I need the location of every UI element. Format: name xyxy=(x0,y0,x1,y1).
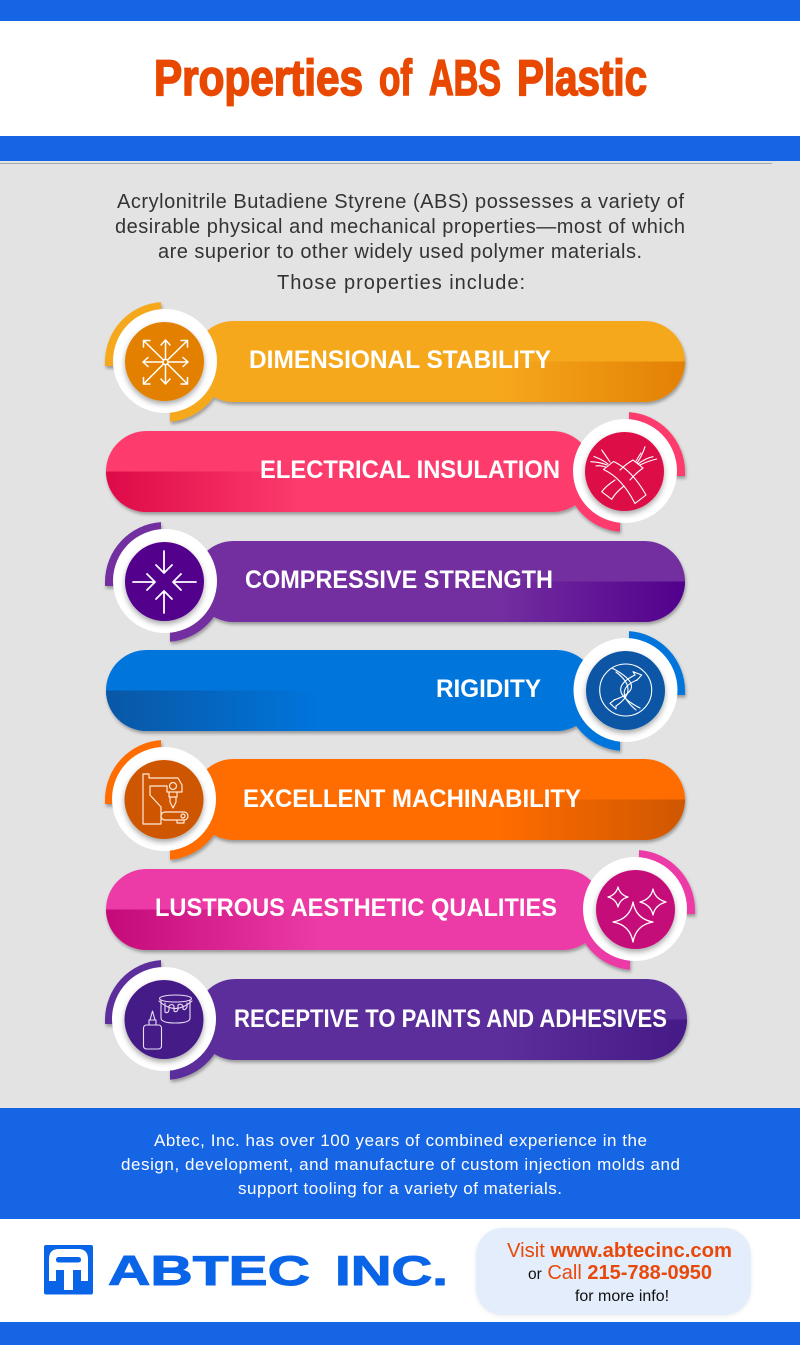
band below title xyxy=(0,136,800,161)
description text: Abtec, Inc. has over 100 years of combined experience in the xyxy=(154,1131,647,1150)
title panel xyxy=(0,21,800,136)
title: ABS xyxy=(429,50,501,106)
description text: support tooling for a variety of materials. xyxy=(238,1179,562,1198)
icon: rigid bending arrows xyxy=(600,664,652,716)
icon: crossed wires xyxy=(591,447,657,504)
banner: receptive to paints and adhesives xyxy=(105,960,687,1080)
description text: design, development, and manufacture of custom injection molds and xyxy=(121,1155,680,1174)
title xyxy=(154,50,647,106)
label: LUSTROUS AESTHETIC QUALITIES xyxy=(155,894,557,922)
intro text: desirable physical and mechanical properties—most of which xyxy=(115,216,685,238)
intro text: Those properties include: xyxy=(277,272,525,294)
icon: sparkles xyxy=(608,887,666,942)
logo wordmark: ABTEC xyxy=(108,1247,310,1294)
contact callout xyxy=(476,1228,751,1315)
logo mark xyxy=(44,1245,93,1294)
title: Plastic xyxy=(517,50,647,106)
contact callout: or Call 215-788-0950 xyxy=(528,1262,712,1284)
label: RECEPTIVE TO PAINTS AND ADHESIVES xyxy=(234,1005,667,1033)
icon: machine drill xyxy=(143,774,188,824)
icon: paint can and glue bottle xyxy=(144,995,192,1049)
icon: expanding arrows xyxy=(143,340,188,384)
top band xyxy=(0,0,800,21)
label: RIGIDITY xyxy=(436,675,541,703)
bottom band xyxy=(0,1322,800,1345)
banner: electrical insulation xyxy=(106,412,685,532)
logo wordmark: INC. xyxy=(335,1247,448,1294)
intro text: are superior to other widely used polymer materials. xyxy=(158,241,642,263)
banner: excellent machinability xyxy=(105,740,685,860)
intro text: Acrylonitrile Butadiene Styrene (ABS) possesses a variety of xyxy=(117,191,684,213)
label: EXCELLENT MACHINABILITY xyxy=(243,785,581,813)
logo wordmark xyxy=(108,1247,448,1294)
logo and contact panel xyxy=(0,1219,800,1322)
footer description panel xyxy=(0,1108,800,1219)
title: of xyxy=(379,50,412,106)
icon: compression arrows xyxy=(133,551,196,613)
label: COMPRESSIVE STRENGTH xyxy=(245,566,553,594)
intro text xyxy=(115,191,685,294)
title: Properties xyxy=(154,50,363,106)
label: DIMENSIONAL STABILITY xyxy=(249,346,551,374)
banner: dimensional stability xyxy=(105,302,685,422)
banner: lustrous aesthetic qualities xyxy=(106,850,695,970)
banner: compressive strength xyxy=(105,522,685,642)
contact callout: for more info! xyxy=(575,1288,669,1305)
banner: rigidity xyxy=(106,631,685,751)
description text xyxy=(121,1131,680,1198)
label: ELECTRICAL INSULATION xyxy=(260,456,560,484)
contact callout: Visit www.abtecinc.com xyxy=(507,1240,732,1262)
